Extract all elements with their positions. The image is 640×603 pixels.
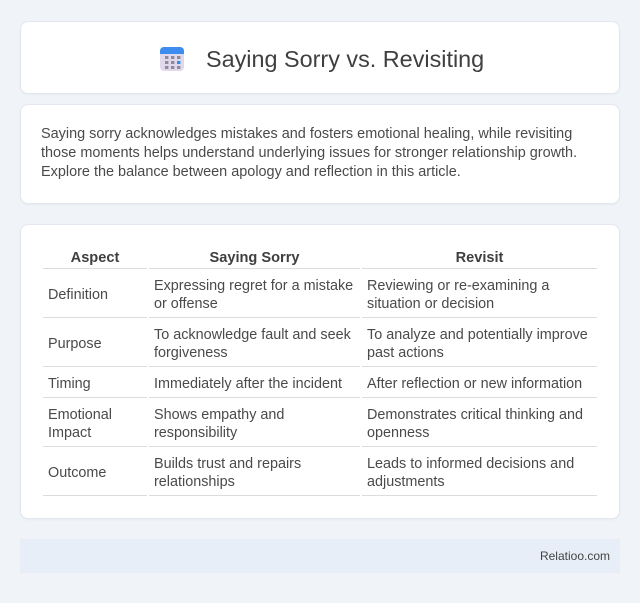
- table: Impact: [48, 425, 91, 441]
- table: To analyze and potentially improve: [367, 327, 588, 343]
- row: timing: [48, 376, 582, 392]
- table header row: [71, 250, 504, 266]
- table: Aspect: [71, 250, 119, 266]
- table: Expressing regret for a mistake: [154, 278, 353, 294]
- row: definition: [48, 278, 550, 312]
- intro text: Explore the balance between apology and reflection in this article.: [41, 164, 461, 180]
- table: Revisit: [456, 250, 503, 266]
- table: Immediately after the incident: [154, 376, 342, 392]
- table: Demonstrates critical thinking and: [367, 407, 583, 423]
- table: Timing: [48, 376, 91, 392]
- row: purpose: [48, 327, 588, 361]
- row: emotional impact: [48, 407, 583, 441]
- table: forgiveness: [154, 345, 228, 361]
- table: or offense: [154, 296, 218, 312]
- table: Purpose: [48, 336, 102, 352]
- panel: comparison table: [20, 224, 620, 519]
- icon: calendar: [160, 47, 184, 71]
- table: After reflection or new information: [367, 376, 582, 392]
- panel: introduction: [20, 104, 620, 204]
- intro text: Saying sorry acknowledges mistakes and fosters emotional healing, while revisiting: [41, 126, 572, 142]
- footer credit: Relatioo.com: [540, 549, 610, 563]
- title: Saying Sorry vs. Revisiting: [206, 46, 484, 72]
- table: openness: [367, 425, 429, 441]
- table: Definition: [48, 287, 108, 303]
- table: situation or decision: [367, 296, 494, 312]
- footer: [20, 539, 620, 573]
- table: Outcome: [48, 465, 106, 481]
- table: Shows empathy and: [154, 407, 284, 423]
- table: Saying Sorry: [209, 250, 300, 266]
- table: responsibility: [154, 425, 237, 441]
- table: adjustments: [367, 474, 445, 490]
- table: To acknowledge fault and seek: [154, 327, 351, 343]
- panel: header: [20, 21, 620, 94]
- table: Builds trust and repairs: [154, 456, 301, 472]
- intro text: [41, 126, 577, 180]
- table: Reviewing or re-examining a: [367, 278, 549, 294]
- table: Leads to informed decisions and: [367, 456, 574, 472]
- intro text: those moments helps understand underlying issues for stronger relationship growth.: [41, 145, 577, 161]
- table: past actions: [367, 345, 444, 361]
- table: Emotional: [48, 407, 112, 423]
- table: relationships: [154, 474, 235, 490]
- row: outcome: [48, 456, 574, 490]
